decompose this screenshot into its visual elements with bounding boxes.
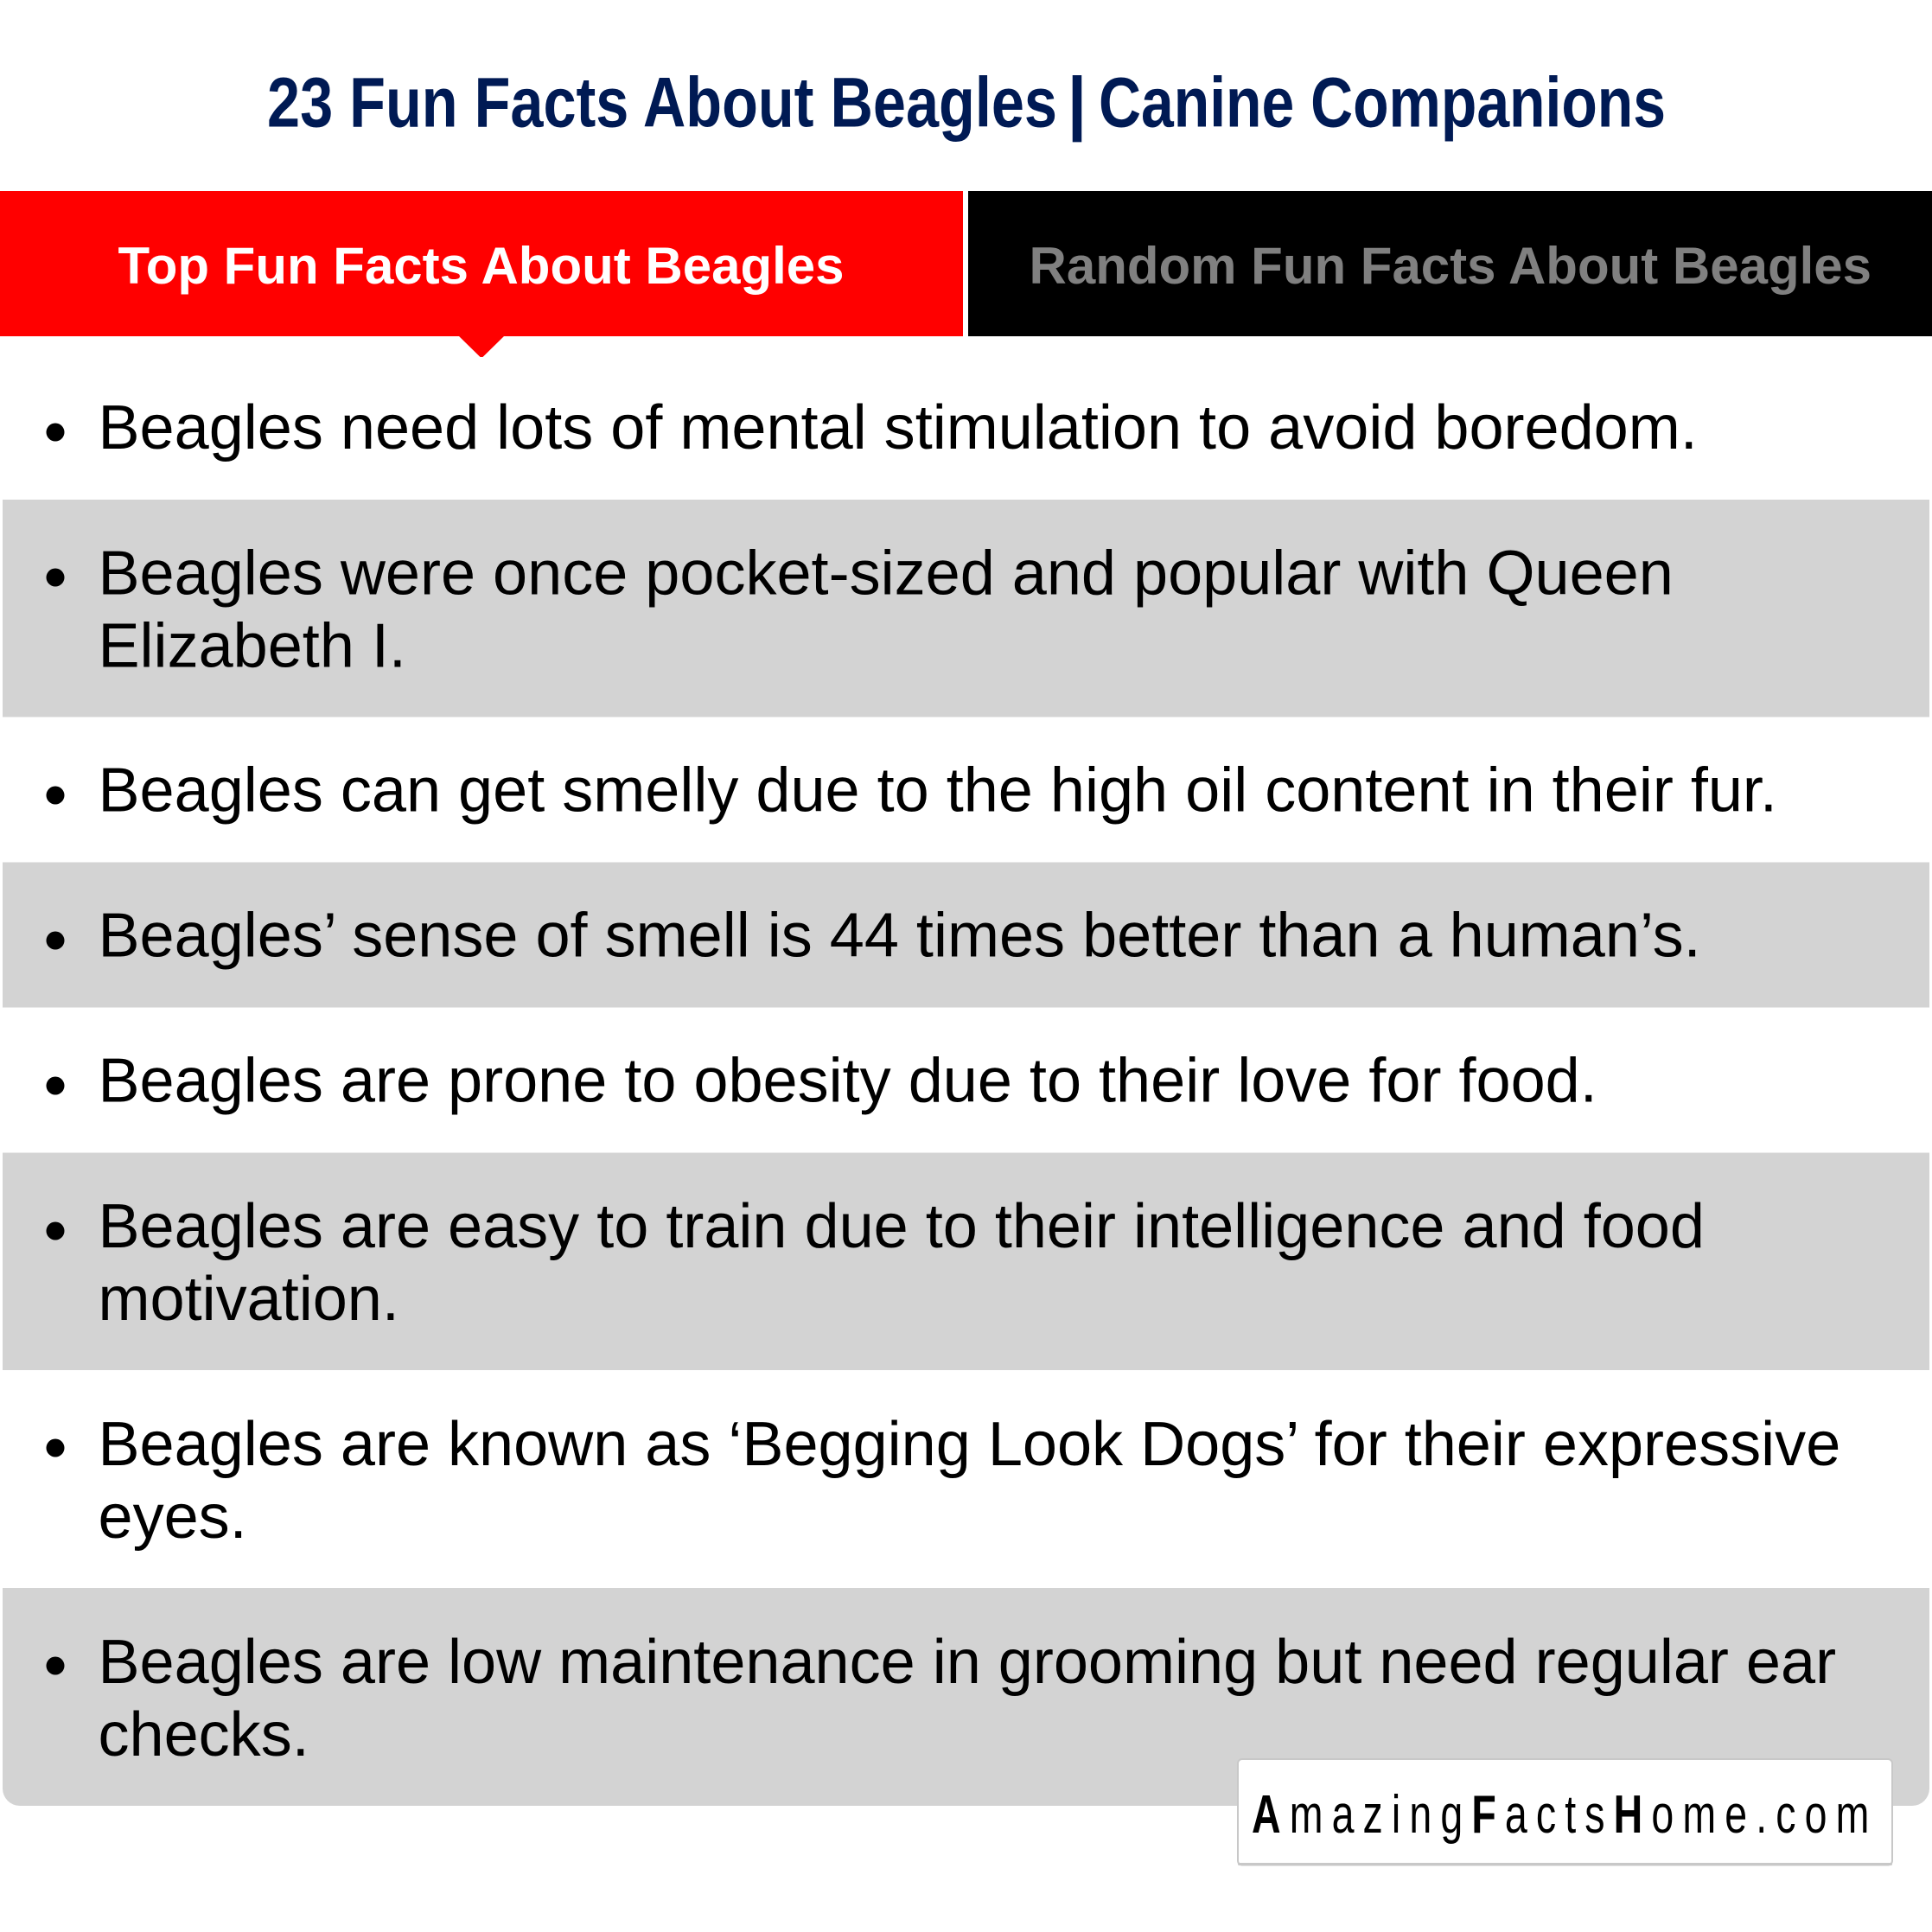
fact row 7: Beagles are known as ‘Begging Look Dogs’ for their expressive	[99, 1410, 1840, 1479]
fact row 4	[3, 863, 1929, 1008]
fact row 8	[3, 1588, 1929, 1806]
fact row 7	[47, 1410, 1840, 1552]
active tab: top fun facts: Top Fun Facts About Beagles	[118, 237, 845, 295]
fact row 2: Elizabeth I.	[99, 612, 406, 681]
fact row 6	[3, 1153, 1929, 1370]
inactive tab: random fun facts: Random Fun Facts About Beagles	[1029, 237, 1871, 295]
fact row 5: Beagles are prone to obesity due to their love for food.	[99, 1046, 1597, 1115]
title	[267, 64, 1666, 143]
fact row 7: eyes.	[99, 1482, 247, 1552]
fact row 6: Beagles are easy to train due to their intelligence and food	[99, 1192, 1705, 1261]
fact row 8: Beagles are low maintenance in grooming but need regular ear	[99, 1628, 1836, 1697]
watermark badge: AmazingFactsHome.com	[1252, 1783, 1878, 1845]
fact row 2: Beagles were once pocket-sized and popular with Queen	[99, 539, 1674, 609]
fact row 6: motivation.	[99, 1265, 399, 1334]
fact row 8: checks.	[99, 1700, 309, 1769]
fact row 4: Beagles’ sense of smell is 44 times better than a human’s.	[99, 901, 1701, 970]
title: |	[1067, 64, 1087, 143]
fact row 3: Beagles can get smelly due to the high oil content in their fur.	[99, 756, 1777, 825]
inactive tab: random fun facts	[968, 191, 1932, 336]
watermark badge	[1238, 1759, 1892, 1865]
fact row 1: Beagles need lots of mental stimulation to avoid boredom.	[99, 393, 1698, 462]
title: Canine Companions	[1099, 64, 1666, 142]
fact row 2	[3, 500, 1929, 717]
active tab: top fun facts	[0, 191, 963, 357]
title: 23 Fun Facts About Beagles	[267, 64, 1057, 142]
